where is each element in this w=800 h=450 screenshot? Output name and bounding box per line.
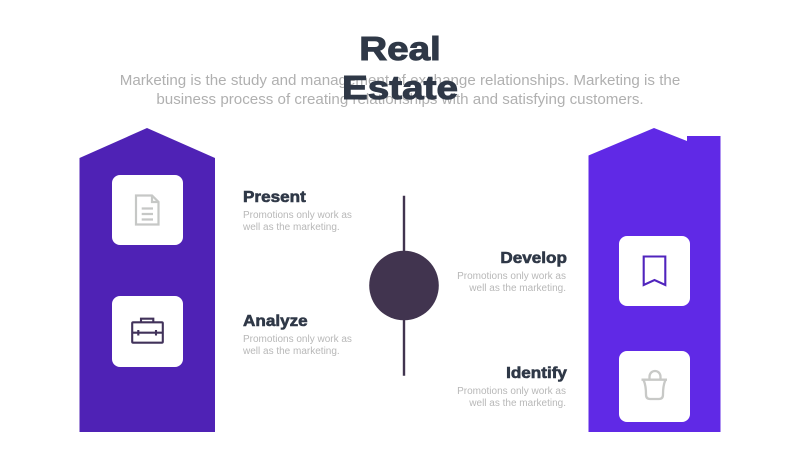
card: shopping bag icon <box>619 351 690 422</box>
text: identify: well as the marketing. <box>469 398 566 409</box>
text: identify <box>457 365 568 409</box>
text: present: Promotions only work as <box>243 210 352 221</box>
text: develop: well as the marketing. <box>469 283 566 294</box>
title: Real <box>359 30 441 66</box>
text: develop: Promotions only work as <box>457 271 566 282</box>
title: Estate <box>342 69 458 106</box>
text: present <box>243 188 352 233</box>
text: analyze: Analyze <box>243 313 308 330</box>
text: analyze <box>243 313 352 357</box>
title <box>342 30 458 106</box>
subtitle <box>120 72 680 108</box>
text: develop <box>457 250 567 294</box>
text: analyze: Promotions only work as <box>243 334 352 345</box>
card: document icon <box>112 174 183 245</box>
text: present: Present <box>243 188 306 206</box>
card: bookmark icon <box>619 236 690 306</box>
text: analyze: well as the marketing. <box>243 346 340 357</box>
subtitle: Marketing is the study and management of exchange relationships. Marketing is the <box>120 72 680 89</box>
text: identify: Promotions only work as <box>457 386 566 397</box>
text: develop: Develop <box>500 250 567 267</box>
subtitle: business process of creating relationships with and satisfying customers. <box>156 91 644 108</box>
text: present: well as the marketing. <box>243 222 340 233</box>
text: identify: Identify <box>506 365 567 382</box>
card: briefcase icon <box>112 296 183 366</box>
